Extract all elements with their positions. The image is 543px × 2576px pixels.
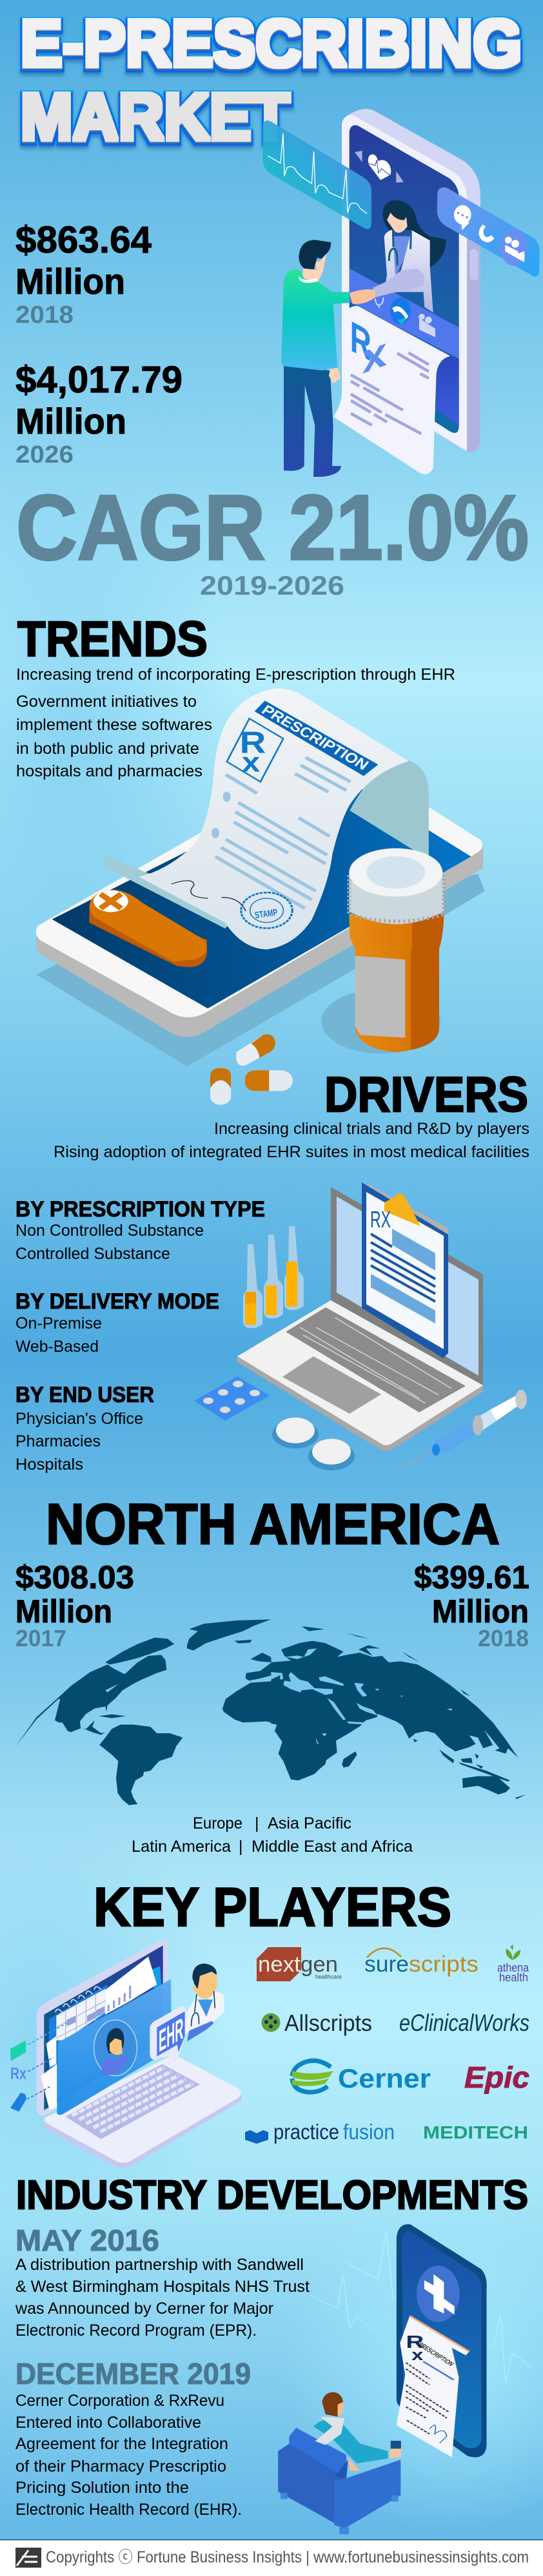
development: December 2019 [15,2357,251,2519]
inner screen panel [437,356,459,425]
ampoules [243,1226,304,1328]
icon: heart [368,154,391,180]
stat: market size 2026: Million [15,401,126,441]
prescription: x [411,2347,423,2364]
logo: practicefusion [245,2120,395,2144]
small icons: Rx [10,2065,26,2083]
signature [172,881,246,911]
logo: surescripts: scripts [409,1952,479,1977]
segment: by end user: Physician's Office [15,1410,143,1428]
north america: NORTH AMERICA [46,1492,500,1556]
logo: MEDITECH: MEDITECH [423,2122,528,2142]
other regions: | [239,1838,242,1856]
key players heading: KEY PLAYERS [94,1877,451,1938]
development: December 2019: Entered into Collaborative [15,2414,201,2432]
laptop base [44,2054,242,2168]
illustration: phone prescription and patient in armchair [278,2224,531,2534]
trends: in both public and private [16,740,199,758]
segment: by prescription type: BY PRESCRIPTION TYPE [15,1197,265,1222]
other regions: Middle East and Africa [252,1838,413,1856]
development: May 2016: & West Birmingham Hospitals NHS Trust [15,2278,310,2296]
title [21,6,522,153]
trends [16,611,455,780]
stat: market size 2026: $4,017.79 [15,359,183,401]
map: Eurasia, Africa and Oceania [271,1626,526,1799]
segment: by delivery mode: Web-Based [15,1338,99,1356]
stat: north america 2018: Million [432,1593,529,1629]
laptop lid [37,1939,168,2116]
stat: market size 2018: $863.64 [15,219,152,261]
stat: market size 2018: 2018 [15,302,74,329]
other regions [132,1814,413,1856]
logo: Cerner: Cerner [338,2063,431,2093]
tablet [36,752,483,1037]
paper flap [104,855,242,928]
segment: by prescription type [15,1197,265,1263]
stat: north america 2018 [414,1559,529,1651]
stamp: STAMP [254,908,279,921]
drivers [54,1067,529,1161]
development: December 2019: DECEMBER 2019 [15,2357,251,2390]
development: May 2016 [15,2224,310,2340]
drivers: Increasing clinical trials and R&D by players [214,1120,529,1138]
stat: north america 2017 [15,1559,134,1651]
prescription: PRESCRIPTION [416,2341,455,2367]
logo: athenahealth [497,1945,529,1984]
pill bottle [349,848,444,1052]
ground shadow [36,874,485,1066]
banner: prescription: PRESCRIPTION [258,702,371,773]
prescription: R [406,2332,424,2352]
logo: Cerner [292,2061,431,2093]
illustration: phone with doctor and patient [262,109,540,477]
ecg panel [262,120,371,229]
illustration: laptop with clipboard and medicine [194,1182,527,1470]
other regions: Asia Pacific [268,1814,351,1832]
development: May 2016: A distribution partnership with Sandwell [15,2256,304,2274]
drivers: Rising adoption of integrated EHR suites in most medical facilities [54,1143,529,1161]
small icons [10,2023,66,2111]
phone [397,2224,487,2457]
development: December 2019: of their Pharmacy Prescriptio [15,2457,226,2475]
stat: market size 2026 [15,359,183,468]
logo: Allscripts: Allscripts [284,2010,372,2036]
CAGR: 2019-2026 [200,570,344,601]
seas [271,1648,452,1744]
segment: by prescription type: Non Controlled Substance [15,1222,204,1240]
segment: by end user [15,1383,154,1474]
logos [245,1945,529,2144]
laptop base [237,1300,483,1451]
avatar [94,2020,137,2076]
logo: Epic: Epic [464,2061,529,2094]
segment: by delivery mode: BY DELIVERY MODE [15,1289,219,1314]
logo: athenahealth: health [499,1971,528,1984]
syringe [404,1390,527,1466]
tablets [272,1418,355,1470]
laptop lid [331,1187,483,1385]
illustration: EHR laptop: EHR [159,2010,183,2059]
segment: by prescription type: Controlled Substance [15,1245,170,1263]
clipboard [362,1182,448,1358]
prescription sheet: x [362,328,387,383]
development: December 2019: Electronic Health Record (EHR). [15,2501,242,2519]
armchair [278,2444,400,2534]
illustration: EHR laptop [10,1939,242,2168]
segment: by end user: BY END USER [15,1383,154,1407]
segment: by delivery mode [15,1289,219,1356]
orange bar [90,890,207,967]
logo: practicefusion: fusion [343,2120,395,2144]
development: December 2019: Cerner Corporation & RxRevu [15,2392,224,2410]
stat: north america 2017: $308.03 [15,1559,134,1595]
segment: by end user: Pharmacies [15,1432,101,1450]
calendar [56,1989,105,2041]
capsules [210,1034,293,1105]
rx box: R [240,726,266,760]
patient [289,2392,402,2478]
keyboard [66,2064,200,2139]
other regions: Latin America [132,1838,231,1856]
stat: market size 2018 [15,219,152,329]
other regions: | [255,1814,259,1832]
trends: hospitals and pharmacies [16,762,202,780]
drivers: DRIVERS [324,1067,528,1122]
trends: Increasing trend of incorporating E-prescription through EHR [16,666,455,684]
trends: TRENDS [17,611,208,667]
segment: by end user: Hospitals [15,1456,83,1474]
title: MARKET [21,80,290,153]
development: December 2019: Agreement for the Integration [15,2435,228,2453]
rx box: x [242,747,260,778]
stamp [241,892,292,928]
control band [350,269,459,359]
logo: nextgen: next [258,1952,301,1977]
stat: market size 2018: Million [15,261,125,302]
EHR bubble [150,2006,186,2064]
logo: nextgen [257,1947,342,1981]
development: May 2016: Electronic Record Program (EPR). [15,2321,257,2340]
stat: north america 2018: $399.61 [414,1559,529,1595]
paper sheet [139,688,409,950]
stat: north america 2017: Million [15,1593,112,1629]
other regions: Europe [193,1814,242,1832]
icon: Fortune Business Insights logo [15,2548,41,2568]
logo: surescripts [364,1948,479,1977]
stat: market size 2026: 2026 [15,441,74,468]
development: May 2016: was Announced by Cerner for Major [15,2300,273,2318]
stat: north america 2018: 2018 [478,1625,529,1651]
clipboard: RX [370,1206,391,1233]
title: E-PRESCRIBING [21,6,522,80]
rx box [227,718,283,782]
doctor [185,1963,224,2041]
logo: nextgen: gen [301,1952,338,1977]
folder [57,1979,172,2115]
development: May 2016: MAY 2016 [15,2224,159,2257]
development: December 2019: Pricing Solution into the [15,2479,189,2497]
doctor [373,200,446,312]
logo: athenahealth: athena [497,1961,529,1974]
footer [0,2539,543,2576]
trends: Government initiatives to [16,693,197,711]
phone body [342,109,480,450]
logo: surescripts: sure [364,1952,409,1977]
blister pack [194,1376,270,1421]
phone screen [350,125,459,433]
map: Americas and Greenland [15,1619,272,1805]
prescription sheet [333,306,450,474]
prescription [397,2316,469,2457]
prescription sheet: R [350,312,371,371]
paper curl [350,760,429,860]
illustration: prescription on tablet with pill bottle [36,688,485,1105]
world map [15,1619,526,1805]
segment: by delivery mode: On-Premise [15,1314,102,1332]
contact panel [437,187,540,276]
stat: north america 2017: 2017 [15,1625,66,1651]
logo: practicefusion: practice [273,2120,339,2144]
trends: implement these softwares [16,716,212,734]
logo: nextgen: healthcare [315,1974,342,1980]
man [281,240,375,477]
call controls [375,298,435,337]
